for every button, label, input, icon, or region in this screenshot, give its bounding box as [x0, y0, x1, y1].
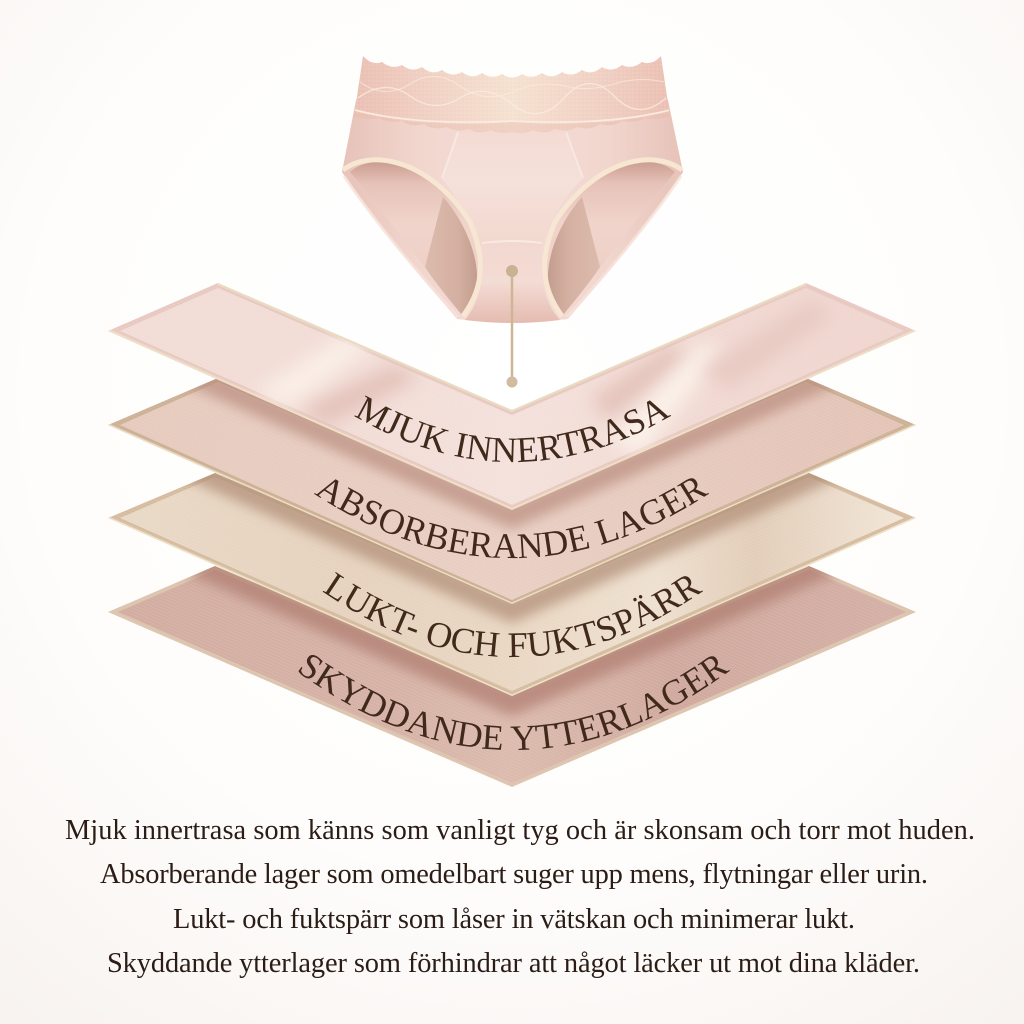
label: skyddande ytterlager: SKYDDANDE YTTERLAGER: [298, 655, 730, 750]
label: absorberande lager: ABSORBERANDE LAGER: [314, 478, 709, 558]
description line 4: Skyddande ytterlager som förhindrar att något läcker ut mot dina kläder.: [107, 948, 920, 979]
leg trims: [343, 160, 480, 316]
callout pointer: [506, 265, 518, 388]
description line 1: Mjuk innertrasa som känns som vanligt tyg och är skonsam och torr mot huden.: [65, 815, 975, 846]
layer 3: odour and moisture barrier: [108, 473, 916, 696]
briefs outer body: [342, 100, 683, 322]
layer 1: soft inner fabric: [108, 283, 916, 510]
lace waistband: [354, 56, 670, 133]
illustration: period briefs: [342, 50, 683, 388]
label: lukt- och fuktspärr: LUKT- OCH FUKTSPÄRR: [322, 572, 703, 658]
layer 2: absorbent layer: [108, 379, 916, 604]
right leg back fabric: [546, 162, 675, 315]
label: mjuk innertrasa: MJUK INNERTRASA: [354, 396, 672, 462]
description line 3: Lukt- och fuktspärr som låser in vätskan och minimerar lukt.: [173, 904, 855, 935]
left inner panel: [425, 197, 477, 315]
left leg back fabric: [350, 162, 479, 315]
description text block: [65, 815, 975, 979]
layer 4: protective outer layer: [108, 566, 916, 787]
right inner panel: [548, 197, 600, 315]
gusset: [465, 242, 560, 323]
description line 2: Absorberande lager som omedelbart suger upp mens, flytningar eller urin.: [100, 859, 928, 890]
front panel: [441, 130, 583, 245]
